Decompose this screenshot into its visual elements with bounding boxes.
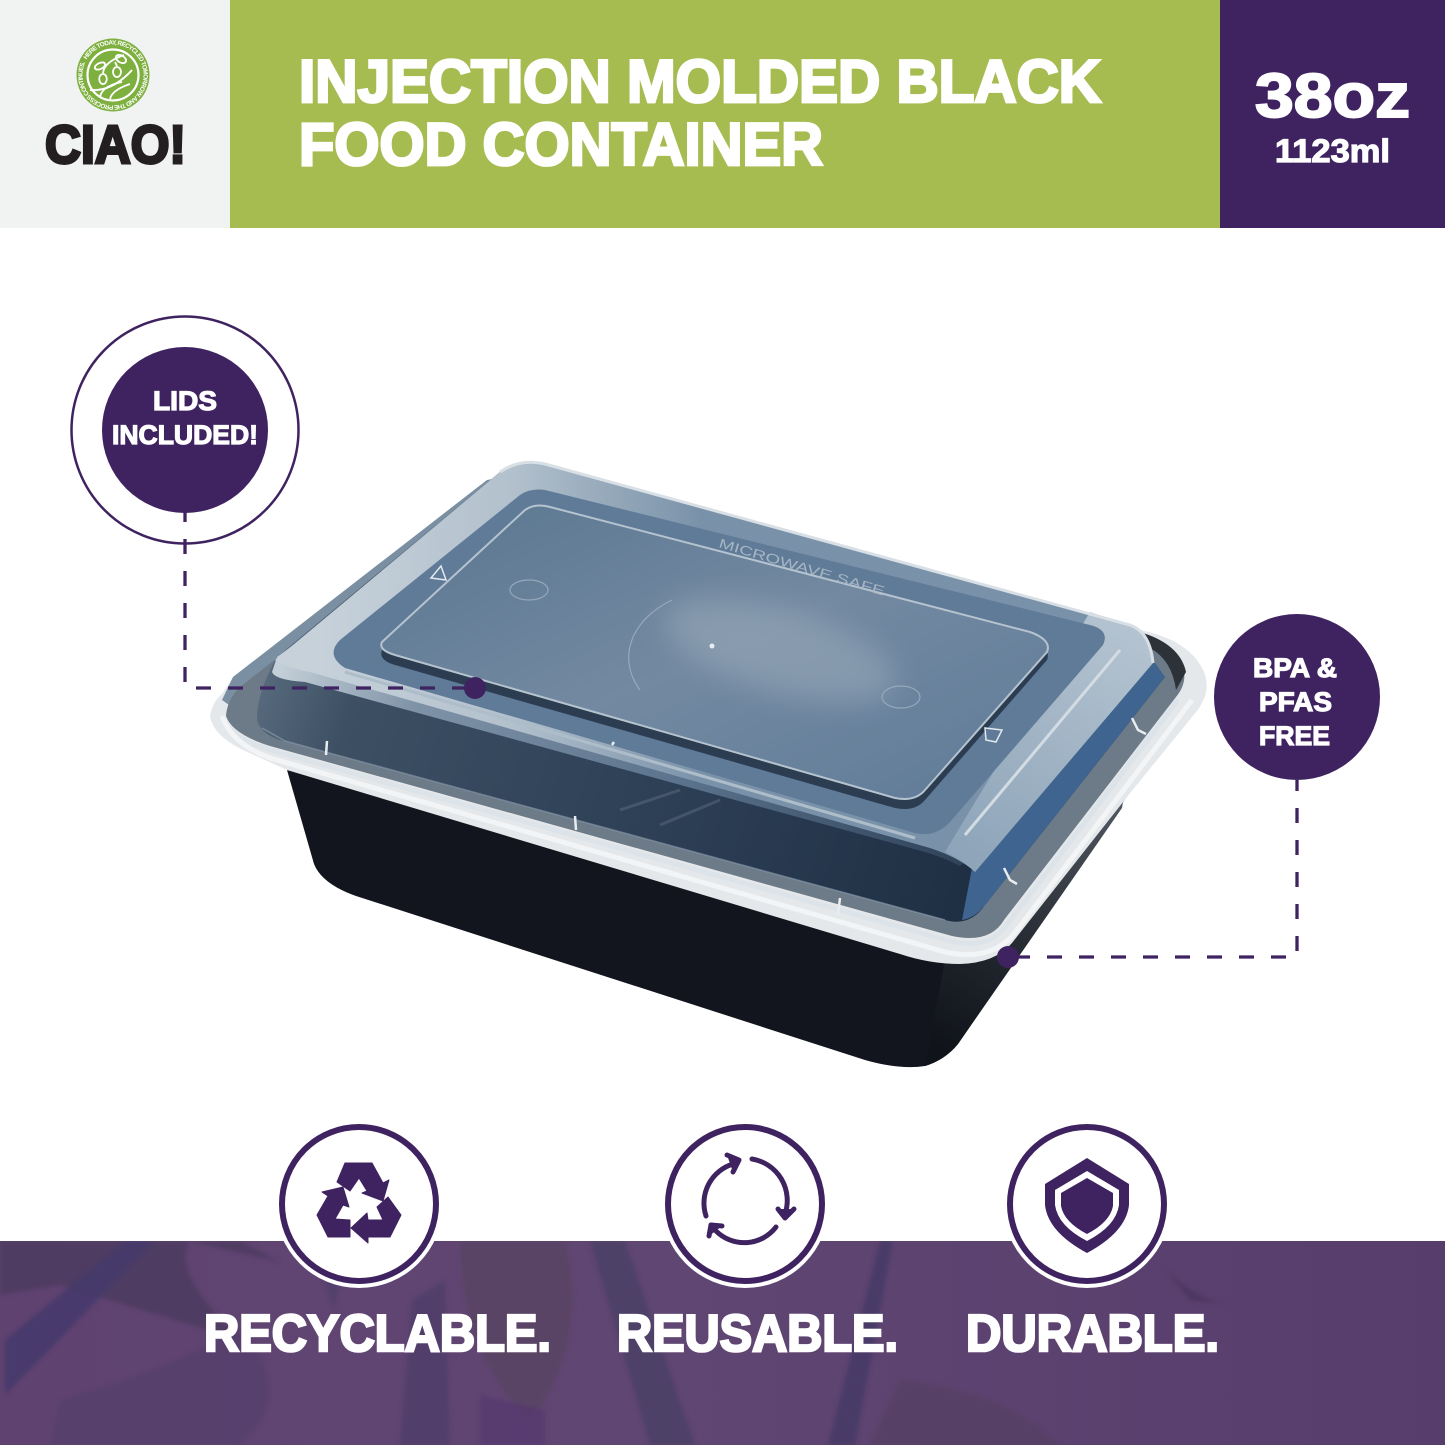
callout leader line <box>1015 780 1297 957</box>
header: logo panel <box>0 0 230 228</box>
header: capacity panel <box>1220 0 1445 228</box>
lid tabs <box>326 718 1146 915</box>
rim front bands <box>222 700 1192 955</box>
dome step band <box>272 640 968 866</box>
callout dot <box>997 946 1019 968</box>
dome shoulder right side <box>945 612 1153 872</box>
feature label: REUSABLE. <box>617 1305 898 1363</box>
callout ring <box>72 316 298 544</box>
rim channel <box>226 490 1184 938</box>
callout text <box>112 386 258 450</box>
callout text: PFAS <box>1259 687 1332 717</box>
callout text: INCLUDED! <box>112 420 258 450</box>
lid circular mould marks <box>510 580 920 708</box>
callout leader line <box>185 511 467 688</box>
callout badge <box>102 347 268 513</box>
product photo: container <box>210 462 1207 1067</box>
callout badge <box>1214 614 1380 780</box>
capacity 38oz: 38oz <box>1255 62 1410 131</box>
dome wall <box>257 462 1165 922</box>
callout dot <box>464 677 486 699</box>
shoulder bright lines <box>965 650 1120 835</box>
lid dome <box>257 462 1165 922</box>
callout: lids included <box>72 316 486 699</box>
feature label: RECYCLABLE. <box>204 1305 551 1363</box>
icon ring <box>275 1120 443 1288</box>
callout text <box>1253 653 1337 751</box>
dome shoulder <box>275 462 1153 872</box>
feature: reusable <box>617 1120 898 1363</box>
title: INJECTION MOLDED BLACK <box>299 48 1101 115</box>
icon: embossed dish mark <box>985 728 1002 742</box>
header: title panel <box>230 0 1220 228</box>
callout text: BPA & <box>1253 653 1337 683</box>
title <box>299 48 1101 178</box>
icon ring <box>661 1120 829 1288</box>
second tier <box>334 490 1105 834</box>
callout text: FREE <box>1259 721 1330 751</box>
icon: circular arrows <box>704 1155 794 1243</box>
feature label: DURABLE. <box>966 1305 1219 1363</box>
wall highlight <box>262 728 945 920</box>
callout text: LIDS <box>153 386 217 416</box>
lid centre point <box>710 644 714 648</box>
feature: durable <box>966 1120 1219 1363</box>
dome right wall <box>962 660 1165 920</box>
dome top edge <box>500 462 1153 663</box>
lid plateau <box>381 514 1048 809</box>
icon ring <box>1003 1120 1171 1288</box>
bottom band with leaf pattern <box>0 1241 1445 1445</box>
container base <box>287 770 1128 1067</box>
embossed text: microwave safe: MICROWAVE SAFE <box>717 535 887 599</box>
feature: recyclable <box>204 1120 551 1363</box>
logo wordmark: CIAO! <box>45 115 186 175</box>
rim right corner shadow <box>1140 632 1186 690</box>
icon: shield <box>1045 1158 1129 1253</box>
lid soft reflection <box>653 577 907 723</box>
icon: recycling arrows <box>317 1163 401 1243</box>
rim upper left strip <box>222 470 540 720</box>
icon: ciao logo badge: HERE TODAY, RECYCLED TOMORROW. AND THE PROCESS CONTINUES. <box>78 40 148 110</box>
title: FOOD CONTAINER <box>299 111 823 178</box>
icon: embossed recycle mark <box>431 566 446 580</box>
capacity 1123ml: 1123ml <box>1275 133 1390 169</box>
clear lid rim <box>210 480 1207 964</box>
callout: bpa and pfas free <box>997 614 1380 968</box>
